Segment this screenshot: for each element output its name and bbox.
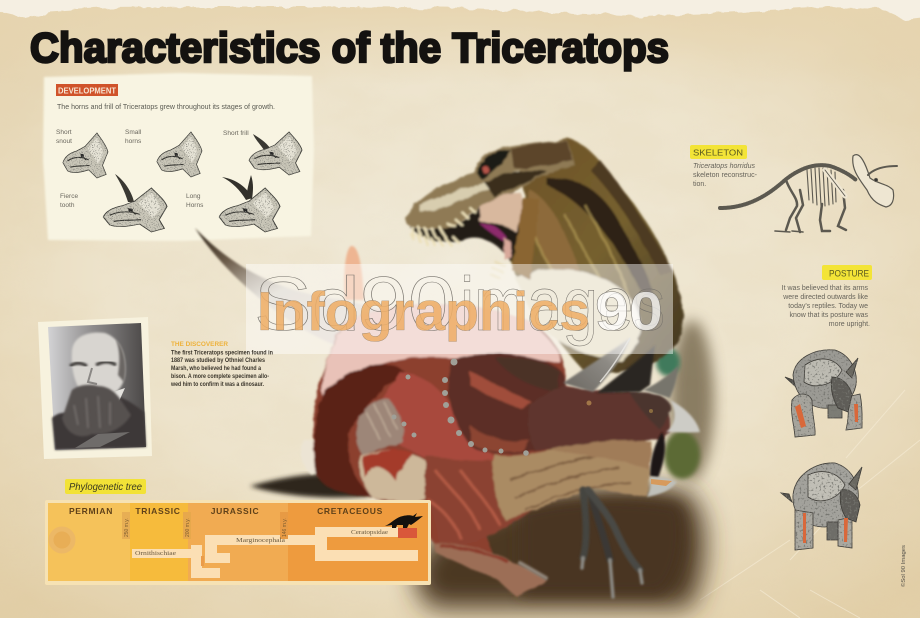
text: posture: today's reptiles. Today we — [788, 303, 868, 310]
clade names — [135, 529, 388, 557]
neck — [493, 440, 650, 520]
label: phylogenetic tree — [65, 479, 146, 494]
text: posture: were directed outwards like — [782, 294, 868, 301]
stage: fierce tooth: Fierce — [60, 193, 78, 200]
text: posture: more upright. — [829, 321, 870, 328]
drawing: sprawling posture — [785, 350, 862, 437]
period labels: PERMIAN — [69, 506, 113, 516]
stage: short frill — [223, 130, 302, 175]
watermark: images — [460, 262, 665, 347]
stage: long horns: Long — [186, 193, 201, 200]
rex mouth — [409, 193, 520, 262]
panel: phylogenetic timeline — [45, 500, 431, 585]
sitter head — [72, 333, 125, 398]
period labels: CRETACEOUS — [317, 506, 383, 516]
drawing: triceratops skeleton — [720, 155, 897, 232]
illustration: triceratops — [195, 228, 700, 597]
text: the discoverer: The first Triceratops specimen found in — [171, 350, 273, 356]
jurassic band — [188, 503, 288, 581]
text: posture: know that its posture was — [789, 312, 869, 319]
period labels: TRIASSIC — [135, 506, 181, 516]
label: phylogenetic tree: Phylogenetic tree — [69, 482, 142, 493]
posture highlight: upright arms — [803, 513, 848, 543]
ceratopsidae marker — [398, 528, 417, 538]
nose horn — [666, 400, 700, 432]
foreleg — [433, 543, 547, 597]
text: posture: It was believed that its arms — [782, 285, 869, 292]
text: the discoverer — [170, 341, 275, 388]
text: the discoverer: bison. A more complete specimen allo- — [171, 373, 269, 380]
posture highlight: sprawling arms — [795, 404, 858, 428]
clade names: Ceratopsidae — [351, 529, 388, 536]
rex throat — [512, 197, 540, 280]
triassic band — [130, 503, 188, 581]
label: development: DEVELOPMENT — [58, 86, 116, 96]
text: skeleton: Triceratops horridus — [693, 163, 755, 170]
panel: discoverer portrait — [38, 317, 152, 459]
eyes — [586, 400, 592, 406]
clade names: Ornithischiae — [135, 550, 176, 557]
emblem — [51, 529, 73, 551]
clawed forelimb — [520, 490, 642, 597]
watermark — [246, 262, 673, 354]
ground shadow — [250, 320, 714, 608]
brow horns — [597, 345, 655, 393]
stage: small horns: Small — [125, 129, 142, 136]
stage: long horns: Horns — [186, 202, 204, 209]
clade names: Marginocephala — [236, 537, 285, 544]
illustration: tyrannosaurus — [405, 138, 683, 373]
frill spikes — [392, 358, 529, 456]
title: Characteristics of the Triceratops — [30, 24, 669, 71]
date tags: 250 m.y. — [124, 518, 130, 537]
text: skeleton: skeleton reconstruc- — [693, 172, 758, 179]
rex body — [510, 138, 683, 373]
label: posture — [822, 265, 872, 280]
head — [528, 385, 670, 450]
pale fold — [356, 399, 404, 455]
date tags: 200 m.y. — [185, 518, 191, 537]
text: skeleton: tion. — [693, 181, 706, 188]
rump — [301, 440, 325, 475]
sitter coat — [52, 395, 146, 450]
stage: short frill: Short frill — [223, 130, 249, 137]
belly — [425, 455, 533, 552]
label: posture: POSTURE — [829, 268, 869, 280]
stage: small horns — [125, 129, 202, 177]
watermark: 90 — [595, 280, 663, 342]
text: the discoverer: THE DISCOVERER — [171, 341, 228, 348]
credit: ©Sol 90 Images — [900, 545, 907, 587]
text: the discoverer: 1887 was studied by Othniel Charles — [171, 357, 265, 364]
panel: development — [43, 73, 314, 241]
stage: short snout — [56, 129, 108, 178]
sitter collar — [113, 388, 125, 408]
drawing: upright posture — [781, 463, 862, 550]
stage: short snout: Short — [56, 129, 72, 136]
period labels: JURASSIC — [211, 506, 259, 516]
label: skeleton: SKELETON — [693, 148, 743, 158]
icon: triceratops silhouette — [385, 513, 423, 528]
stage: fierce tooth: tooth — [60, 202, 75, 209]
date tags: 146 m.y. — [282, 518, 288, 537]
watermark: Infographics — [257, 280, 590, 342]
pink back — [322, 304, 560, 400]
frill — [448, 353, 565, 454]
body — [313, 304, 648, 580]
text: the discoverer: wed him to confirm it was a dinosaur. — [170, 381, 264, 388]
flank — [360, 450, 428, 502]
stage: short snout: snout — [56, 138, 72, 145]
period labels — [69, 506, 383, 516]
tree branches — [132, 527, 418, 578]
text: the discoverer: Marsh, who believed he had found a — [171, 365, 261, 372]
text: development intro: The horns and frill of Triceratops grew throughout its stages of growth. — [57, 102, 275, 111]
sitter beard — [62, 385, 131, 436]
rex teeth — [411, 207, 476, 247]
lower beak — [647, 477, 677, 497]
photo — [48, 323, 146, 450]
watermark: Sd90 — [254, 262, 456, 347]
stage: long horns — [186, 175, 280, 232]
raised thigh marker — [344, 246, 364, 300]
maroon haunch — [314, 365, 405, 497]
stage: fierce tooth — [60, 174, 167, 232]
label: skeleton — [690, 145, 747, 159]
permian band — [48, 503, 130, 581]
cretaceous band — [288, 503, 428, 581]
open mouth — [650, 432, 665, 478]
date tags — [122, 512, 288, 539]
stage: small horns: horns — [125, 138, 142, 145]
tail — [195, 228, 420, 349]
rex head — [405, 140, 575, 229]
rex chest — [515, 269, 640, 362]
